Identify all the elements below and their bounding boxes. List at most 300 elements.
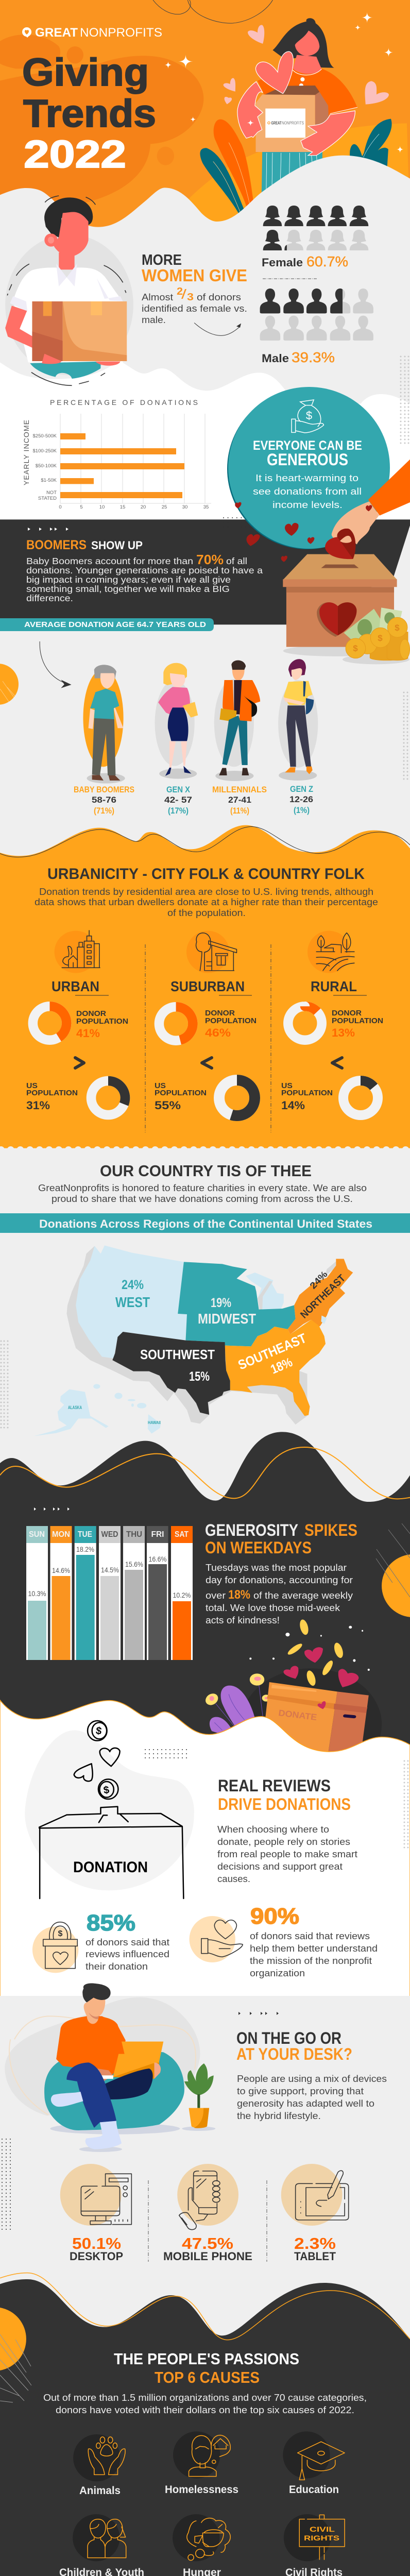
decoration: orange circle right with hatching xyxy=(376,1523,410,1617)
label: hawaii: HAWAII xyxy=(148,1420,161,1425)
stat: tablet 2.3% xyxy=(281,2164,349,2263)
coin dollar signs: $ xyxy=(353,643,358,653)
label: southwest 15% xyxy=(140,1347,215,1384)
person: gen z xyxy=(278,659,318,781)
label on donate box: DONATE xyxy=(278,1708,317,1722)
arrow to people grid xyxy=(194,323,241,335)
label: gen x: (17%) xyxy=(168,806,189,816)
hearts xyxy=(283,1647,358,1709)
urbanicity heading and intro: of the population. xyxy=(167,908,246,918)
banner: donations across regions xyxy=(0,1213,410,1233)
coin xyxy=(88,1721,107,1741)
dot pattern right xyxy=(401,357,408,447)
ribbon: average donation age xyxy=(0,618,214,631)
stat: tablet 2.3%: TABLET xyxy=(294,2250,336,2263)
heading: our country tis of thee: GreatNonprofits is honored to feature charities in every state. We are also xyxy=(38,1183,367,1193)
bar chart: percentage of donations by yearly income: 30 xyxy=(182,504,187,510)
stat: desktop 50.1%: DESKTOP xyxy=(70,2250,123,2263)
heading: our country tis of thee: OUR COUNTRY TIS OF THEE xyxy=(100,1162,312,1180)
stat: 90%: the mission of the nonprofit xyxy=(250,1956,372,1966)
shadows xyxy=(283,646,391,656)
bar chart: percentage of donations by yearly income: STATED xyxy=(38,496,57,501)
coin dollar signs: $ xyxy=(395,623,400,633)
bar: friday 16.6% xyxy=(147,1526,168,1660)
stat: 90%: help them better understand xyxy=(250,1943,378,1954)
text block: real reviews drive donations: causes. xyxy=(217,1874,250,1884)
text block: generosity spikes on weekdays xyxy=(205,1521,357,1625)
plant xyxy=(184,2063,214,2128)
coin dollar signs: $ xyxy=(378,633,383,643)
small hearts xyxy=(235,502,372,562)
stat: 85%: 85% xyxy=(87,1910,135,1936)
panel: rural: US xyxy=(281,1081,293,1090)
label: midwest 19%: MIDWEST xyxy=(198,1311,256,1327)
map: continental united states xyxy=(34,1245,353,1436)
label: donation: DONATION xyxy=(73,1859,148,1876)
stars xyxy=(249,1626,370,1671)
panel: rural: DONOR xyxy=(332,1009,362,1018)
decorative arrows xyxy=(238,2012,279,2015)
box label logo xyxy=(268,121,304,126)
arms xyxy=(237,81,263,138)
panel: rural: RURAL xyxy=(311,978,357,994)
logo: GreatNonprofits: NONPROFITS xyxy=(80,26,162,40)
bar: friday 16.6%: FRI xyxy=(151,1530,164,1539)
stat: 85%: their donation xyxy=(86,1961,148,1972)
stat: tablet 2.3%: 2.3% xyxy=(294,2234,336,2252)
cause: animals: Animals xyxy=(79,2485,121,2497)
callout circle: everyone can be generous: $ xyxy=(306,409,312,422)
panel: urban: POPULATION xyxy=(26,1089,78,1097)
heart xyxy=(74,1764,93,1781)
stat: desktop 50.1% xyxy=(60,2164,131,2263)
panel: suburban: POPULATION xyxy=(155,1089,207,1097)
text block: generosity spikes on weekdays: 18% xyxy=(228,1588,250,1602)
icon: less than xyxy=(332,1058,342,1068)
panel: suburban: US xyxy=(155,1081,166,1090)
dot pattern right 2 xyxy=(404,692,407,782)
laptop xyxy=(113,2042,163,2077)
panel: rural: 13% xyxy=(332,1026,355,1039)
label: southeast 18%: 18% xyxy=(268,1355,295,1377)
title: Giving Trends 2022: Giving xyxy=(22,50,149,94)
map labels xyxy=(68,1269,348,1425)
female and male stats: 60.7% xyxy=(306,253,348,269)
stat: 85%: reviews influenced xyxy=(86,1949,169,1959)
face and neck xyxy=(54,212,89,257)
bar: sunday 10.3%: SUN xyxy=(29,1530,45,1539)
heading: our country tis of thee: proud to share that we have donations coming from across the U.S. xyxy=(52,1194,353,1204)
cardboard box xyxy=(32,301,127,361)
label: millennials: MILLENNIALS xyxy=(212,785,267,794)
label: baby boomers: (71%) xyxy=(94,806,114,816)
bar chart: percentage of donations by yearly income: NOT xyxy=(46,490,57,496)
label: millennials xyxy=(212,785,267,816)
cause: hunger xyxy=(173,2514,230,2576)
trousers xyxy=(262,151,322,197)
white wave background xyxy=(0,361,410,529)
heading and text: more women give: identified as female vs. xyxy=(142,303,247,314)
text block: real reviews drive donations: REAL REVIEWS xyxy=(218,1776,331,1795)
text block: boomers show up: Baby Boomers account for more than xyxy=(26,556,193,566)
people grid: female 60.7% xyxy=(263,206,368,250)
bar: saturday 10.2%: 10.2% xyxy=(173,1591,191,1599)
stat: 90%: organization xyxy=(250,1968,305,1978)
dotted pattern xyxy=(2,2139,10,2230)
bar: thursday 15.6%: 15.6% xyxy=(125,1560,143,1568)
decorative arrows xyxy=(34,1507,70,1511)
icon: coin into box xyxy=(32,1922,78,1973)
region: southwest xyxy=(112,1332,230,1415)
text block: generosity spikes on weekdays: of the average weekly xyxy=(253,1590,353,1601)
white wave background: reviews xyxy=(0,1700,410,1996)
stat: 85%: $ xyxy=(58,1929,63,1938)
neck and shirt xyxy=(293,55,322,76)
dark section background: boomers xyxy=(0,519,410,624)
cause: civil rights: RIGHTS xyxy=(304,2534,339,2542)
stat: 90%: 90% xyxy=(250,1904,299,1929)
heading: our country tis of thee xyxy=(38,1162,367,1204)
illustration: person on beanbag with laptop xyxy=(5,1983,215,2152)
cause: homelessness: Homelessness xyxy=(165,2484,238,2496)
label: west 24% xyxy=(115,1278,150,1310)
text block: on the go or at your desk: generosity has adapted well to xyxy=(237,2098,374,2109)
heading: the people's passions: TOP 6 CAUSES xyxy=(155,2368,260,2386)
text block: generosity spikes on weekdays: day for donations, accounting for xyxy=(206,1575,353,1585)
label: gen z xyxy=(289,784,313,815)
urbanicity heading and intro xyxy=(35,866,378,918)
stat: 85% xyxy=(32,1910,169,1973)
title: Giving Trends 2022: 2022 xyxy=(24,132,126,176)
arm xyxy=(5,306,61,364)
cause: civil rights: CIVIL xyxy=(310,2525,335,2533)
heading: the people's passions xyxy=(43,2350,367,2415)
heading: the people's passions: THE PEOPLE'S PASSIONS xyxy=(114,2350,299,2368)
stat: mobile phone 47.5%: MOBILE PHONE xyxy=(163,2250,252,2263)
icon: desktop computer xyxy=(60,2164,131,2226)
dotted pattern xyxy=(224,518,273,527)
decoration: orange circle left with hatching xyxy=(0,2308,31,2402)
scalloped edge xyxy=(1,1996,409,2002)
coins xyxy=(286,1619,345,1686)
label: midwest 19% xyxy=(198,1296,256,1327)
icon: less than xyxy=(202,1058,212,1068)
dot pattern right 3 xyxy=(404,1761,408,1851)
bar: tuesday 18.2%: TUE xyxy=(78,1530,92,1539)
bar chart: percentage of donations by yearly income: 5 xyxy=(80,504,83,510)
text block: generosity spikes on weekdays: ON WEEKDAYS xyxy=(205,1538,312,1557)
person: baby boomer xyxy=(83,665,125,784)
donut: urban donor population 41% xyxy=(33,1006,66,1040)
box lid xyxy=(283,554,397,580)
heading and text: more women give: 2 xyxy=(177,286,183,297)
donut: rural us population 14% xyxy=(343,1081,378,1115)
label: southwest 15%: 15% xyxy=(189,1369,210,1384)
heading and text: more women give: WOMEN GIVE xyxy=(142,266,247,285)
text block: on the go or at your desk: the hybrid lifestyle. xyxy=(237,2111,321,2121)
box label logo: GREAT xyxy=(271,121,282,126)
panel: urban: POPULATION xyxy=(76,1017,128,1026)
bar chart: percentage of donations by yearly income: 0 xyxy=(59,504,62,510)
motion lines xyxy=(7,196,126,385)
logo: GreatNonprofits: GREAT xyxy=(35,26,78,40)
heading and text: more women give: male. xyxy=(142,314,166,325)
bar chart: percentage of donations by yearly income: 35 xyxy=(203,504,209,510)
dark wave background: causes xyxy=(0,2273,410,2576)
alaska xyxy=(34,1389,109,1436)
sleeve xyxy=(368,460,410,516)
region: midwest xyxy=(178,1262,296,1346)
text block: boomers show up: 70% xyxy=(196,552,224,567)
box xyxy=(263,1682,369,1753)
callout circle: everyone can be generous: income levels. xyxy=(272,500,343,510)
female and male stats: Female xyxy=(262,256,303,269)
panel: urban xyxy=(26,930,128,1115)
cause: education: Education xyxy=(289,2484,339,2496)
bar: thursday 15.6%: THU xyxy=(126,1530,142,1539)
label: millennials: 27-41 xyxy=(228,795,251,805)
box label logo: NONPROFITS xyxy=(282,121,304,126)
panel: rural: POPULATION xyxy=(281,1089,333,1097)
hand xyxy=(332,501,379,545)
panel: suburban: 55% xyxy=(155,1099,181,1112)
bar: saturday 10.2%: SAT xyxy=(175,1530,189,1539)
text block: boomers show up: SHOW UP xyxy=(91,539,143,552)
label: gen x: 42- 57 xyxy=(164,795,192,805)
sparkles xyxy=(164,12,404,153)
panel: suburban: 46% xyxy=(205,1026,231,1039)
urbanicity heading and intro: Donation trends by residential area are close to U.S. living trends, although xyxy=(39,887,373,897)
generations illustrations xyxy=(40,641,318,784)
bar: monday 14.6%: MON xyxy=(52,1530,70,1539)
stat: 90% xyxy=(190,1904,378,1978)
bar: saturday 10.2% xyxy=(171,1526,193,1660)
pale hearts xyxy=(224,25,389,105)
coin dollar signs xyxy=(353,623,400,653)
big heart xyxy=(255,52,293,94)
label: gen x xyxy=(164,785,192,816)
illustration: sketch donation box xyxy=(39,1721,183,1899)
text block: boomers show up: something small, together we will make a BIG xyxy=(26,584,230,594)
callout circle: everyone can be generous: EVERYONE CAN BE xyxy=(253,438,362,453)
text block: boomers show up: difference. xyxy=(26,593,73,603)
bar chart: percentage of donations by yearly income: 20 xyxy=(141,504,146,510)
label: gen z: (1%) xyxy=(294,805,310,815)
label: baby boomers: BABY BOOMERS xyxy=(74,785,134,794)
text block: on the go or at your desk: to give support, proving that xyxy=(237,2086,364,2096)
title: Giving Trends 2022 xyxy=(22,50,156,176)
bar chart: weekly donations xyxy=(26,1526,193,1660)
hair xyxy=(44,197,93,239)
dark wave background: generosity section xyxy=(0,1432,410,1772)
panel: suburban: POPULATION xyxy=(205,1016,257,1025)
text block: on the go or at your desk: AT YOUR DESK? xyxy=(236,2045,352,2063)
hawaii xyxy=(93,1384,161,1434)
text block: boomers show up: big impact in coming years; even if we all give xyxy=(26,574,231,585)
label: southeast 18%: SOUTHEAST xyxy=(236,1330,309,1373)
gray section background: devices xyxy=(0,1996,410,2357)
dotted pattern xyxy=(145,1750,188,1758)
banner: donations across regions: Donations Across Regions of the Continental United States xyxy=(39,1217,372,1230)
callout circle: everyone can be generous: see donations from all xyxy=(253,486,362,497)
heading and text: more women give: MORE xyxy=(142,252,182,268)
text block: generosity spikes on weekdays: over xyxy=(206,1590,226,1601)
panel: urban: 31% xyxy=(26,1099,50,1112)
leaves xyxy=(200,119,392,215)
label: midwest 19%: 19% xyxy=(211,1296,231,1310)
heart xyxy=(100,1748,120,1766)
text block: generosity spikes on weekdays: total. We love those mid-week xyxy=(206,1603,340,1613)
region: northeast xyxy=(287,1259,353,1334)
curved arrow xyxy=(40,641,72,688)
bar chart: percentage of donations by yearly income: 10 xyxy=(99,504,105,510)
text block: real reviews drive donations: donate, people rely on stories xyxy=(217,1837,350,1847)
bar chart: percentage of donations by yearly income: $1-50K xyxy=(41,478,57,483)
text block: generosity spikes on weekdays: acts of kindness! xyxy=(206,1615,280,1625)
region: michigan xyxy=(246,1273,284,1310)
label: baby boomers xyxy=(74,785,134,816)
label: gen z: 12-26 xyxy=(289,794,313,804)
bar chart: percentage of donations by yearly income: 25 xyxy=(162,504,167,510)
donut: suburban donor population 46% xyxy=(159,1007,193,1041)
illustration: donate box with hearts and coins xyxy=(203,1619,382,1780)
hair xyxy=(272,18,334,68)
axis title: YEARLY INCOME xyxy=(22,420,30,485)
coin dollar signs xyxy=(95,1725,110,1797)
dot pattern left xyxy=(1,1341,8,1431)
panel: rural: 14% xyxy=(281,1099,305,1112)
label: millennials: (11%) xyxy=(230,806,249,816)
stat: mobile phone 47.5% xyxy=(163,2164,252,2263)
illustration: person head and shirt xyxy=(57,1984,125,2054)
bar: monday 14.6% xyxy=(50,1526,72,1660)
urbanicity heading and intro: URBANICITY - CITY FOLK & COUNTRY FOLK xyxy=(47,866,365,883)
cause: homelessness xyxy=(165,2431,238,2496)
label: gen z: GEN Z xyxy=(290,784,313,794)
text block: real reviews drive donations: DRIVE DONATIONS xyxy=(218,1795,351,1814)
bar chart: percentage of donations by yearly income: $250-500K xyxy=(33,433,57,439)
text block: real reviews drive donations xyxy=(217,1776,357,1884)
text block: generosity spikes on weekdays: SPIKES xyxy=(304,1521,357,1539)
gold coins xyxy=(346,617,409,660)
box outline xyxy=(39,1807,183,1899)
donut: urban us population 31% xyxy=(91,1081,125,1115)
box heart xyxy=(317,602,338,637)
bar: friday 16.6%: 16.6% xyxy=(148,1555,167,1563)
text block: real reviews drive donations: decisions and support great xyxy=(217,1861,343,1872)
text block: on the go or at your desk: People are using a mix of devices xyxy=(237,2074,387,2084)
title: Giving Trends 2022: Trends xyxy=(23,92,156,135)
text block: boomers show up: donations. Younger generations are poised to have a xyxy=(26,565,263,575)
coin dollar signs: $ xyxy=(103,1784,110,1797)
bar chart: percentage of donations by yearly income: $100-250K xyxy=(33,448,57,454)
decorative arrows xyxy=(28,528,69,531)
ribbon: average donation age: AVERAGE DONATION AGE 64.7 YEARS OLD xyxy=(24,620,206,629)
icon: heart in hand xyxy=(190,1916,243,1962)
label: baby boomers: 58-76 xyxy=(92,795,116,805)
donut: rural donor population 13% xyxy=(288,1006,322,1040)
label: northeast 24%: 24% xyxy=(308,1269,330,1291)
coin dollar signs: $ xyxy=(95,1725,102,1737)
person: millennial xyxy=(214,660,260,781)
female and male stats: 39.3% xyxy=(292,349,335,365)
icon: tablet and stylus xyxy=(281,2164,349,2226)
falling heart xyxy=(325,529,355,559)
bar: sunday 10.3%: 10.3% xyxy=(28,1589,46,1598)
female and male stats xyxy=(262,253,348,365)
heading and text: more women give: Almost xyxy=(142,292,173,302)
bar chart: percentage of donations by yearly income: $50-100K xyxy=(36,463,57,469)
urbanicity heading and intro: data shows that urban dwellers donate at a higher rate than their percentage xyxy=(35,897,378,907)
icon: farm xyxy=(308,931,354,973)
icon: hand holding phone xyxy=(177,2164,238,2230)
hero background xyxy=(0,0,410,361)
callout circle: everyone can be generous: It is heart-warming to xyxy=(255,473,358,483)
logo: GreatNonprofits xyxy=(23,26,162,40)
panel: suburban xyxy=(155,931,257,1116)
panel: urban: 41% xyxy=(76,1027,100,1040)
decoration: orange circle left xyxy=(0,664,19,705)
text block: real reviews drive donations: When choosing where to xyxy=(217,1824,329,1835)
label: southwest 15%: SOUTHWEST xyxy=(140,1347,215,1362)
cash bills xyxy=(344,609,384,646)
pants xyxy=(30,362,100,379)
panel: rural xyxy=(281,931,383,1115)
heading and text: more women give: / xyxy=(181,286,187,302)
text block: on the go or at your desk: ON THE GO OR xyxy=(236,2029,341,2047)
coin xyxy=(98,1779,118,1799)
text block: generosity spikes on weekdays: Tuesdays was the most popular xyxy=(206,1563,347,1573)
label: west 24%: 24% xyxy=(122,1278,144,1292)
heading and text: more women give: of donors xyxy=(197,292,241,302)
generation labels xyxy=(74,784,313,816)
face xyxy=(295,30,319,56)
icon: money bag in hand xyxy=(292,400,323,433)
region: west xyxy=(76,1245,187,1359)
cause: education xyxy=(283,2431,345,2496)
text block: boomers show up: BOOMERS xyxy=(26,538,87,552)
bar: sunday 10.3% xyxy=(26,1526,48,1660)
bar: wednesday 14.5%: WED xyxy=(101,1530,118,1539)
panel: urban: URBAN xyxy=(52,978,99,994)
cause: civil rights xyxy=(284,2514,345,2576)
shirt xyxy=(56,2016,126,2077)
callout circle: everyone can be generous: GENEROUS xyxy=(267,450,348,469)
text block: real reviews drive donations: from real people to make smart xyxy=(217,1849,357,1859)
illustration: man carrying box xyxy=(5,196,133,385)
callout circle: everyone can be generous xyxy=(227,387,390,549)
chart title: PERCENTAGE OF DONATIONS xyxy=(50,398,198,406)
text block: on the go or at your desk xyxy=(236,2029,387,2121)
person: gen x xyxy=(155,663,198,779)
cause: children and youth xyxy=(59,2514,144,2576)
icon: city xyxy=(55,930,100,973)
hair xyxy=(83,1983,110,2002)
bar: tuesday 18.2%: 18.2% xyxy=(76,1545,94,1553)
people grid: male 39.3% xyxy=(260,289,373,341)
stat: mobile phone 47.5%: 47.5% xyxy=(182,2234,233,2252)
bar chart: percentage of donations by yearly income xyxy=(22,398,211,510)
bar chart: percentage of donations by yearly income: 15 xyxy=(120,504,125,510)
bar: wednesday 14.5% xyxy=(99,1526,121,1660)
text block: generosity spikes on weekdays: GENEROSITY xyxy=(205,1521,298,1539)
female and male stats: Male xyxy=(262,352,289,365)
bar: monday 14.6%: 14.6% xyxy=(52,1566,70,1574)
label: gen x: GEN X xyxy=(166,785,191,794)
urbanicity section background xyxy=(0,825,410,1148)
region: southeast xyxy=(225,1320,326,1416)
illustration: hand dropping heart into donation box xyxy=(235,460,410,664)
